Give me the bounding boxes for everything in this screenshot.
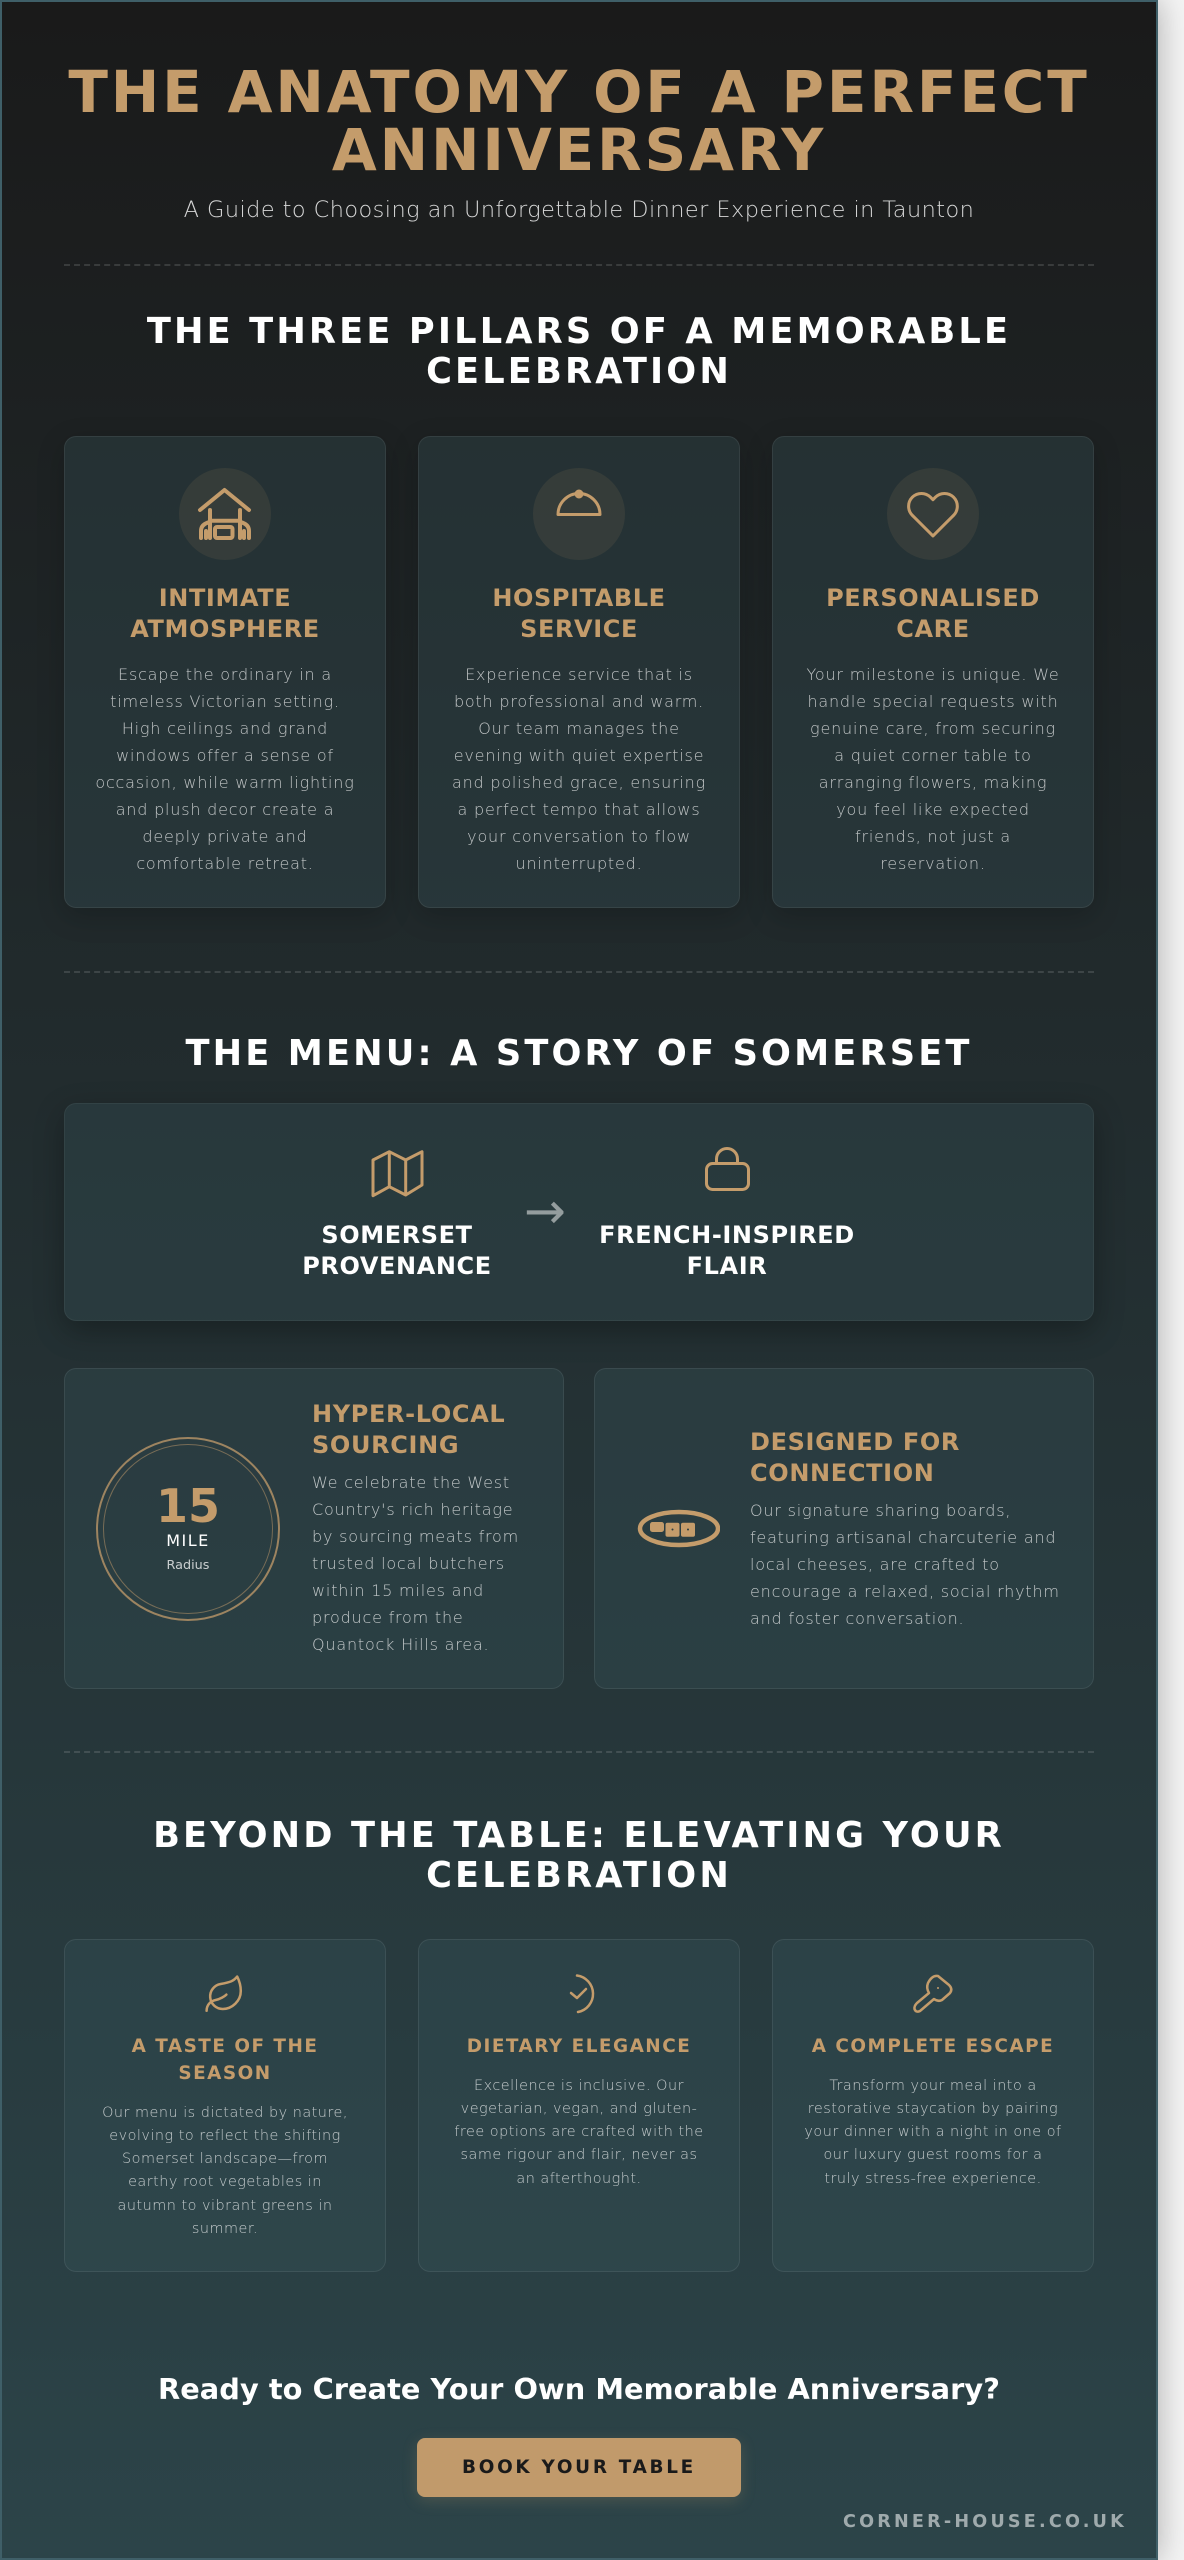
heading: beyond the table: BEYOND THE TABLE: ELEVATING YOUR xyxy=(153,1815,1005,1856)
icon: cloche xyxy=(533,468,625,560)
label: somerset provenance xyxy=(302,1221,492,1280)
card text: Quantock Hills area. xyxy=(312,1635,489,1654)
unit: MILE xyxy=(166,1531,210,1550)
card text: within 15 miles and xyxy=(312,1581,484,1600)
card text: same rigour and flair, never as xyxy=(460,2147,697,2163)
title: ANNIVERSARY xyxy=(332,116,826,184)
card title xyxy=(312,1400,505,1459)
icon: leaf xyxy=(205,1975,242,2012)
card title: SERVICE xyxy=(520,615,638,643)
card text: Our menu is dictated by nature, xyxy=(102,2105,348,2121)
card text: Excellence is inclusive. Our xyxy=(474,2078,684,2094)
title: THE ANATOMY OF A PERFECT xyxy=(68,58,1090,126)
panel: hyper-local sourcing xyxy=(64,1368,564,1689)
card text: reservation. xyxy=(880,854,986,873)
card text: vegetarian, vegan, and gluten- xyxy=(461,2101,697,2117)
card title: CARE xyxy=(896,615,970,643)
card text: High ceilings and grand xyxy=(122,719,328,738)
icon: bag xyxy=(705,1147,750,1191)
card text: autumn to vibrant greens in xyxy=(118,2198,332,2214)
icon: house xyxy=(179,468,271,560)
card text xyxy=(806,665,1060,873)
panel: a complete escape xyxy=(772,1939,1094,2272)
title xyxy=(68,58,1090,184)
card text xyxy=(312,1473,519,1654)
caption: Radius xyxy=(167,1558,209,1573)
card text: our luxury guest rooms for a xyxy=(824,2147,1042,2163)
card title: DESIGNED FOR xyxy=(750,1428,960,1456)
arrow: → xyxy=(524,1182,566,1240)
card title: PERSONALISED xyxy=(826,584,1040,612)
card text: Our signature sharing boards, xyxy=(750,1501,1011,1520)
card text: restorative staycation by pairing xyxy=(808,2101,1058,2117)
icon: check arc xyxy=(570,1974,594,2014)
card text: We celebrate the West xyxy=(312,1473,510,1492)
card text: local cheeses, are crafted to xyxy=(750,1555,1000,1574)
panel: provenance to flair xyxy=(64,1103,1094,1321)
footer url: CORNER-HOUSE.CO.UK xyxy=(843,2512,1127,2532)
card title xyxy=(826,584,1040,643)
label: french-inspired flair: FRENCH-INSPIRED xyxy=(599,1221,855,1249)
card text xyxy=(452,665,706,873)
button: book your table xyxy=(417,2438,741,2497)
icon: map xyxy=(372,1150,424,1198)
badge: 15 mile radius xyxy=(96,1437,280,1621)
card title xyxy=(130,584,320,643)
card text: Country's rich heritage xyxy=(312,1500,513,1519)
card text: truly stress-free experience. xyxy=(824,2171,1042,2187)
card title: SOURCING xyxy=(312,1431,459,1459)
card text: Transform your meal into a xyxy=(829,2078,1037,2094)
panel: hospitable service xyxy=(418,436,740,908)
card text: trusted local butchers xyxy=(312,1554,505,1573)
label: french-inspired flair xyxy=(599,1221,855,1280)
card text: handle special requests with xyxy=(807,692,1059,711)
card title: HOSPITABLE xyxy=(492,584,666,612)
card text: timeless Victorian setting. xyxy=(110,692,340,711)
card text xyxy=(750,1501,1060,1628)
card text: occasion, while warm lighting xyxy=(95,773,355,792)
card text: evening with quiet expertise xyxy=(454,746,704,765)
card title: HYPER-LOCAL xyxy=(312,1400,505,1428)
card title: A TASTE OF THE xyxy=(132,2036,318,2057)
card title: INTIMATE xyxy=(159,584,291,612)
card text xyxy=(454,2078,704,2187)
card text: your conversation to flow xyxy=(467,827,691,846)
card text: free options are crafted with the xyxy=(454,2124,704,2140)
card text: encourage a relaxed, social rhythm xyxy=(750,1582,1060,1601)
heading: the menu: THE MENU: A STORY OF SOMERSET xyxy=(185,1033,973,1074)
card text: Experience service that is xyxy=(465,665,693,684)
heading: three pillars: CELEBRATION xyxy=(426,351,732,392)
card text: summer. xyxy=(192,2221,258,2237)
call to action heading: Ready to Create Your Own Memorable Anniversary? xyxy=(158,2372,1000,2406)
label: somerset provenance: SOMERSET xyxy=(321,1221,473,1249)
icon: key xyxy=(913,1974,953,2013)
panel: personalised care xyxy=(772,436,1094,908)
card title: ATMOSPHERE xyxy=(130,615,320,643)
card text: by sourcing meats from xyxy=(312,1527,519,1546)
card text: your dinner with a night in one of xyxy=(804,2124,1062,2140)
card text: comfortable retreat. xyxy=(136,854,314,873)
card text: Our team manages the xyxy=(478,719,680,738)
card title xyxy=(750,1428,960,1487)
card text: earthy root vegetables in xyxy=(128,2174,322,2190)
card text: and foster conversation. xyxy=(750,1609,964,1628)
card text: a perfect tempo that allows xyxy=(458,800,700,819)
card text: arranging flowers, making xyxy=(819,773,1047,792)
card text xyxy=(102,2105,348,2237)
heading: beyond the table xyxy=(153,1815,1005,1896)
card text xyxy=(804,2078,1062,2187)
card title: A COMPLETE ESCAPE xyxy=(812,2036,1054,2057)
card text xyxy=(95,665,355,873)
label: french-inspired flair: FLAIR xyxy=(687,1252,767,1280)
icon: heart xyxy=(887,468,979,560)
card title xyxy=(132,2036,318,2084)
card text: a quiet corner table to xyxy=(834,746,1032,765)
card text: genuine care, from securing xyxy=(810,719,1056,738)
heading: three pillars xyxy=(147,311,1011,392)
panel: intimate atmosphere xyxy=(64,436,386,908)
subtitle: A Guide to Choosing an Unforgettable Dinner Experience in Taunton xyxy=(184,197,974,223)
card title xyxy=(492,584,666,643)
heading: beyond the table: CELEBRATION xyxy=(426,1855,732,1896)
heading: three pillars: THE THREE PILLARS OF A MEMORABLE xyxy=(147,311,1011,352)
card text: Somerset landscape—from xyxy=(122,2151,328,2167)
card text: produce from the xyxy=(312,1608,464,1627)
card text: evolving to reflect the shifting xyxy=(109,2128,341,2144)
card text: featuring artisanal charcuterie and xyxy=(750,1528,1056,1547)
card text: friends, not just a xyxy=(855,827,1011,846)
card text: uninterrupted. xyxy=(516,854,642,873)
panel: a taste of the season xyxy=(64,1939,386,2272)
card text: and polished grace, ensuring xyxy=(452,773,706,792)
card text: an afterthought. xyxy=(516,2171,642,2187)
card text: Your milestone is unique. We xyxy=(806,665,1060,684)
icon: sharing board xyxy=(638,1510,720,1548)
label: somerset provenance: PROVENANCE xyxy=(302,1252,492,1280)
card text: deeply private and xyxy=(142,827,308,846)
card text: both professional and warm. xyxy=(454,692,704,711)
panel: designed for connection xyxy=(594,1368,1094,1689)
button: book your table: BOOK YOUR TABLE xyxy=(462,2457,696,2478)
card title: DIETARY ELEGANCE xyxy=(467,2036,691,2057)
card text: and plush decor create a xyxy=(116,800,334,819)
card text: you feel like expected xyxy=(836,800,1030,819)
number: 15 xyxy=(156,1479,220,1533)
card title: CONNECTION xyxy=(750,1459,934,1487)
panel: dietary elegance xyxy=(418,1939,740,2272)
card title: SEASON xyxy=(178,2063,272,2084)
card text: Escape the ordinary in a xyxy=(118,665,332,684)
card text: windows offer a sense of xyxy=(116,746,334,765)
